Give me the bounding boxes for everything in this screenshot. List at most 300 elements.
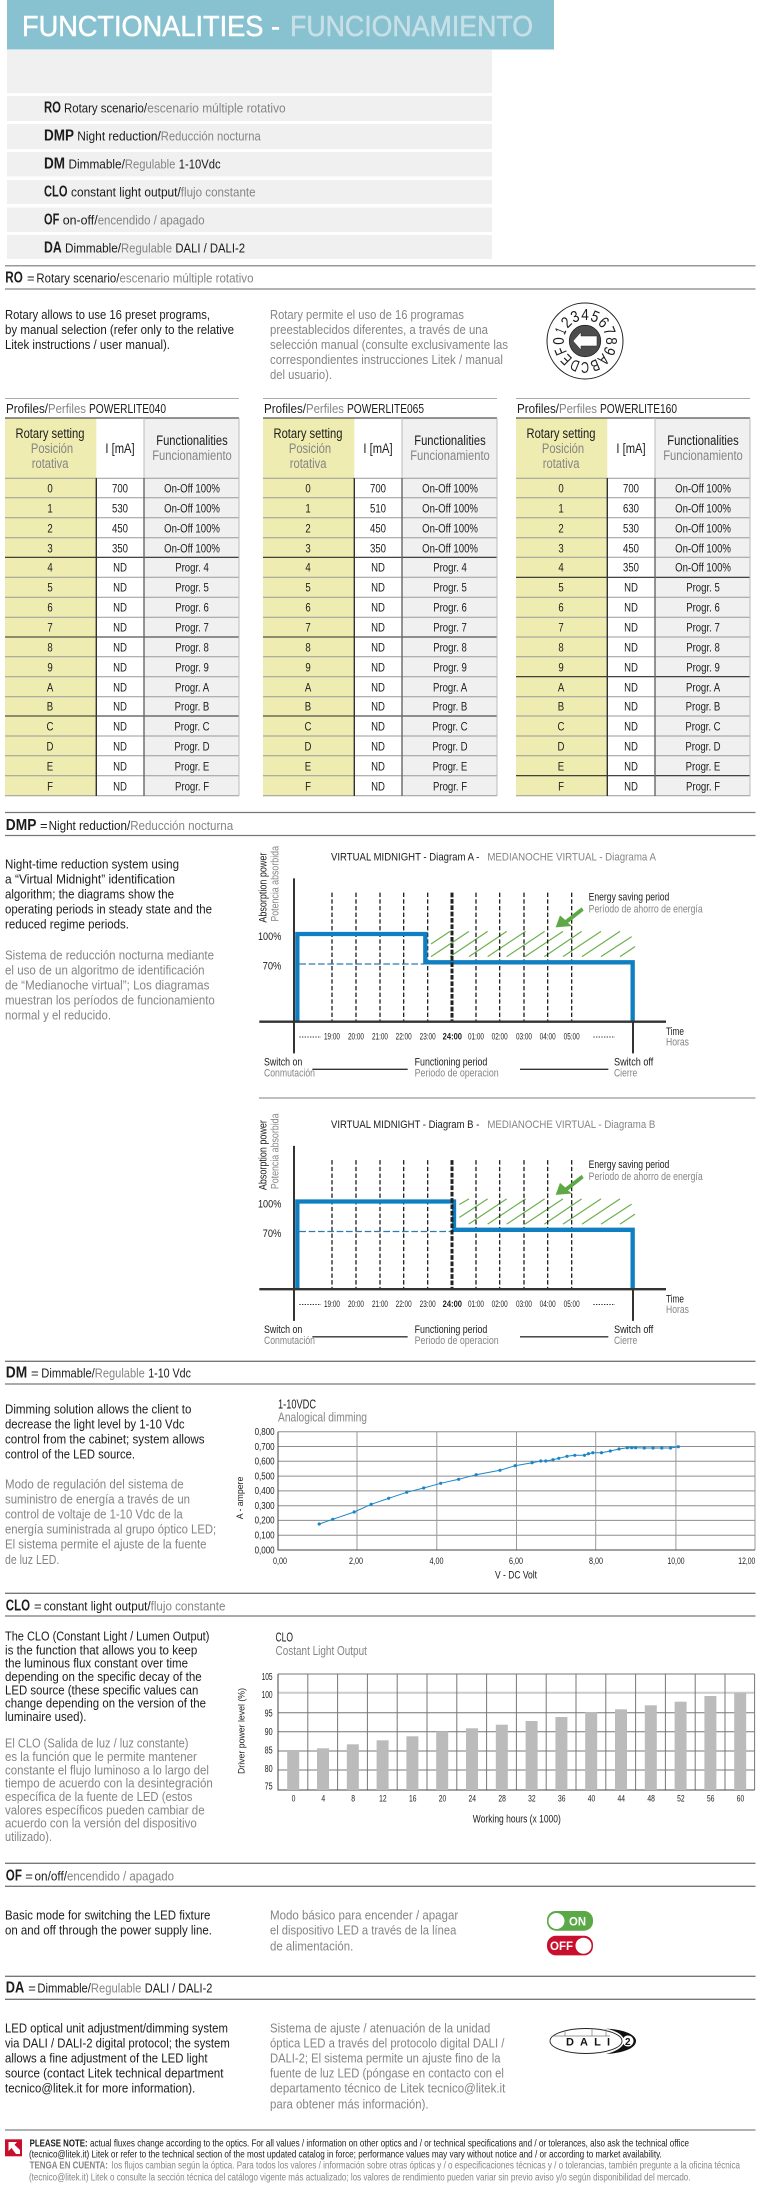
- icon: on switch: [547, 1911, 593, 1931]
- table: POWERLITE160: Progr. E: [686, 761, 720, 774]
- function list panel: escenario múltiple rotativo: [147, 101, 286, 116]
- table: POWERLITE065: D: [305, 741, 312, 754]
- icon: rotary switch: [547, 303, 623, 379]
- table: POWERLITE065: 4: [305, 562, 311, 575]
- table: POWERLITE040: 530: [112, 503, 128, 516]
- chart: constant light output bar chart: 90: [265, 1727, 273, 1738]
- function list panel: Regulable: [121, 241, 172, 256]
- text block: RO english: by manual selection (refer only to the relative: [5, 322, 234, 337]
- table: POWERLITE040: B: [47, 701, 53, 714]
- text block: DM spanish: control de voltaje de 1-10 Vdc de la: [5, 1506, 183, 1521]
- chart: constant light output bar chart: 75: [265, 1782, 273, 1793]
- table: POWERLITE160: Perfiles: [559, 401, 597, 416]
- icon: rotary switch: 2: [558, 314, 576, 332]
- table: POWERLITE040: Progr. E: [175, 761, 209, 774]
- table: POWERLITE065: 9: [305, 662, 311, 675]
- table: POWERLITE065: Progr. F: [433, 781, 467, 794]
- chart: virtual midnight diagram A: Absorption power: [258, 852, 270, 923]
- chart: virtual midnight diagram A: Time: [666, 1026, 684, 1038]
- icon: rotary switch: A: [594, 350, 612, 368]
- table: POWERLITE065: ND: [371, 761, 385, 774]
- chart: constant light output bar chart: 24: [469, 1794, 476, 1804]
- chart: virtual midnight diagram A: Switch off: [614, 1056, 654, 1068]
- table: POWERLITE160: Progr. 8: [686, 642, 720, 655]
- text block: DA spanish: para obtener más información).: [270, 2096, 429, 2111]
- table: POWERLITE040: Functionalities: [156, 433, 228, 448]
- chart: virtual midnight diagram A: 05:00: [564, 1032, 580, 1042]
- table: POWERLITE065: POWERLITE065: [347, 401, 424, 416]
- table: POWERLITE160: Profiles/: [517, 401, 559, 416]
- text block: DA spanish: DALI-2; El sistema permite un ajuste fino de la: [270, 2050, 501, 2065]
- table: POWERLITE160: [516, 398, 750, 796]
- table: POWERLITE040: Progr. 5: [175, 582, 209, 595]
- chart: virtual midnight diagram B: 05:00: [564, 1299, 580, 1309]
- table: POWERLITE160: ND: [624, 721, 638, 734]
- text block: DM english: [5, 1401, 205, 1461]
- footnote text: [29, 2139, 740, 2183]
- table: POWERLITE160: On-Off 100%: [675, 523, 731, 536]
- table: POWERLITE040: Profiles/: [6, 401, 48, 416]
- table: POWERLITE065: Rotary setting: [274, 426, 342, 441]
- table: POWERLITE065: ND: [371, 562, 385, 575]
- table: POWERLITE040: ND: [113, 562, 127, 575]
- text block: DA spanish: [270, 2020, 506, 2111]
- chart: constant light output bar chart: Driver power level (%): [236, 1688, 246, 1774]
- chart: virtual midnight diagram B: Potencia absorbida: [269, 1113, 281, 1189]
- chart: analogical dimming line chart: 10,00: [668, 1556, 684, 1566]
- chart: virtual midnight diagram B: 21:00: [372, 1299, 388, 1309]
- table: POWERLITE160: Progr. A: [686, 682, 721, 695]
- heading: CLO: constant light output/: [44, 1599, 151, 1614]
- table: POWERLITE160: Progr. D: [685, 741, 721, 754]
- chart: virtual midnight diagram A: 23:00: [420, 1032, 436, 1042]
- table: POWERLITE065: Progr. 6: [433, 602, 467, 615]
- text block: CLO spanish: valores específicos pueden cambiar de: [5, 1802, 205, 1817]
- chart: virtual midnight diagram A: Energy saving period: [589, 892, 669, 904]
- text block: DMP spanish: Sistema de reducción nocturna mediante: [5, 947, 214, 962]
- text block: DA english: [5, 2020, 230, 2095]
- table: POWERLITE160: ND: [624, 761, 638, 774]
- heading: RO: escenario múltiple rotativo: [120, 271, 254, 286]
- table: POWERLITE160: 5: [558, 582, 564, 595]
- table: POWERLITE160: Posición: [542, 441, 584, 456]
- table: POWERLITE040: Progr. 4: [175, 562, 209, 575]
- text block: CLO english: LED source (these specific values can: [5, 1683, 198, 1698]
- text block: DM english: Dimming solution allows the client to: [5, 1401, 191, 1416]
- icon: rotary switch: 6: [594, 314, 612, 332]
- text block: DA english: tecnico@litek.it for more information).: [5, 2080, 195, 2095]
- chart: virtual midnight diagram B: Horas: [666, 1304, 689, 1316]
- table: POWERLITE040: Progr. 6: [175, 602, 209, 615]
- table: POWERLITE040: POWERLITE040: [89, 401, 166, 416]
- chart: virtual midnight diagram A: 02:00: [492, 1032, 508, 1042]
- function list panel: Rotary scenario/: [64, 101, 147, 116]
- heading: DM: DM: [6, 1364, 27, 1381]
- text block: CLO spanish: utilizado).: [5, 1829, 52, 1844]
- text block: CLO english: depending on the specific decay of the: [5, 1669, 202, 1684]
- chart: constant light output bar chart: 8: [351, 1794, 355, 1804]
- icon: rotary switch: 3: [569, 308, 582, 327]
- function list panel: encendido / apagado: [98, 213, 205, 228]
- function list panel: OF: [44, 212, 59, 229]
- table: POWERLITE040: 700: [112, 483, 128, 496]
- table: POWERLITE065: On-Off 100%: [422, 503, 478, 516]
- table: POWERLITE160: 7: [558, 622, 564, 635]
- text block: CLO english: The CLO (Constant Light / Lumen Output): [5, 1629, 209, 1644]
- chart: analogical dimming line chart: 0,800: [255, 1427, 275, 1438]
- table: POWERLITE160: Rotary setting: [527, 426, 595, 441]
- table: POWERLITE065: Progr. E: [433, 761, 467, 774]
- table: POWERLITE040: ND: [113, 721, 127, 734]
- table: POWERLITE065: 1: [305, 503, 311, 516]
- chart: virtual midnight diagram A: Horas: [666, 1037, 689, 1049]
- chart: virtual midnight diagram B: Energy saving period: [589, 1159, 669, 1171]
- table: POWERLITE040: Progr. A: [175, 682, 210, 695]
- heading: OF: =: [25, 1869, 33, 1884]
- table: POWERLITE160: B: [558, 701, 564, 714]
- table: POWERLITE160: Progr. C: [685, 721, 721, 734]
- footnote text: TENGA EN CUENTA:: [30, 2161, 108, 2172]
- heading: DMP: Reducción nocturna: [130, 818, 234, 833]
- chart: analogical dimming line chart: 0,200: [255, 1516, 275, 1527]
- chart: virtual midnight diagram A: 70%: [263, 960, 282, 972]
- table: POWERLITE160: 530: [623, 523, 639, 536]
- function list panel: Dimmable/: [65, 241, 121, 256]
- chart: constant light output bar chart: 0: [292, 1794, 295, 1804]
- table: POWERLITE065: Progr. 4: [433, 562, 467, 575]
- text block: CLO english: [5, 1629, 209, 1724]
- table: POWERLITE160: D: [558, 741, 565, 754]
- table: POWERLITE160: 2: [558, 523, 564, 536]
- table: POWERLITE040: ND: [113, 781, 127, 794]
- heading: DMP: =: [40, 818, 48, 833]
- chart: virtual midnight diagram B: Cierre: [614, 1335, 637, 1347]
- table: POWERLITE160: ND: [624, 642, 638, 655]
- table: POWERLITE040: Progr. C: [174, 721, 210, 734]
- heading: DA: Regulable: [91, 1981, 141, 1996]
- text block: RO english: Litek instructions / user manual).: [5, 337, 170, 352]
- table: POWERLITE040: C: [47, 721, 54, 734]
- table: POWERLITE040: ND: [113, 642, 127, 655]
- heading: DA: [5, 1976, 756, 1999]
- chart: virtual midnight diagram B: Periodo de operacion: [415, 1335, 499, 1347]
- text block: RO spanish: preestablecidos diferentes, a través de una: [270, 322, 489, 337]
- chart: constant light output bar chart: 48: [647, 1794, 655, 1804]
- function list panel: on-off/: [63, 213, 98, 228]
- table: POWERLITE040: Progr. D: [174, 741, 210, 754]
- heading: CLO: CLO: [6, 1598, 30, 1615]
- text block: DM spanish: suministro de energía a través de un: [5, 1491, 190, 1506]
- icon: rotary switch: E: [558, 350, 576, 368]
- icon: rotary switch: 1: [553, 326, 570, 337]
- table: POWERLITE160: ND: [624, 741, 638, 754]
- table: POWERLITE040: Progr. 7: [175, 622, 209, 635]
- table: POWERLITE160: Progr. B: [686, 701, 720, 714]
- table: POWERLITE040: Progr. 8: [175, 642, 209, 655]
- table: POWERLITE040: On-Off 100%: [164, 543, 220, 556]
- table: POWERLITE160: Functionalities: [667, 433, 739, 448]
- chart: analogical dimming line chart: 4,00: [430, 1556, 444, 1566]
- table: POWERLITE065: ND: [371, 602, 385, 615]
- text block: CLO spanish: acuerdo con la versión del dispositivo: [5, 1816, 197, 1831]
- table: POWERLITE040: Posición: [31, 441, 73, 456]
- text block: RO english: [5, 307, 234, 352]
- chart: constant light output bar chart: 4: [321, 1794, 325, 1804]
- table: POWERLITE160: ND: [624, 582, 638, 595]
- table: POWERLITE065: 5: [305, 582, 311, 595]
- chart: virtual midnight diagram A: 100%: [258, 931, 282, 943]
- table: POWERLITE160: ND: [624, 701, 638, 714]
- icon: red note arrow: [5, 2139, 22, 2156]
- table: POWERLITE160: 0: [558, 483, 564, 496]
- table: POWERLITE160: ND: [624, 622, 638, 635]
- icon: DALI-2 logo: DALI: [566, 2036, 610, 2048]
- table: POWERLITE065: ND: [371, 701, 385, 714]
- icon: off switch: [547, 1936, 593, 1955]
- table: POWERLITE065: 700: [370, 483, 386, 496]
- table: POWERLITE040: 2: [47, 523, 53, 536]
- table: POWERLITE065: [263, 398, 497, 796]
- chart: constant light output bar chart: 52: [677, 1794, 685, 1804]
- text block: DMP english: a “Virtual Midnight” identification: [5, 871, 175, 886]
- table: POWERLITE040: I [mA]: [105, 441, 135, 456]
- heading: DM: Regulable: [95, 1365, 145, 1380]
- chart: virtual midnight diagram B: 23:00: [420, 1299, 436, 1309]
- chart: virtual midnight diagram A: Functioning period: [415, 1056, 487, 1068]
- text block: OF english: on and off through the power supply line.: [5, 1922, 212, 1937]
- table: POWERLITE040: Funcionamiento: [152, 448, 232, 463]
- table: POWERLITE065: ND: [371, 721, 385, 734]
- table: POWERLITE160: ND: [624, 602, 638, 615]
- chart: virtual midnight diagram A: 04:00: [540, 1032, 556, 1042]
- chart: constant light output bar chart: CLO: [276, 1630, 293, 1645]
- chart: virtual midnight diagram A: 22:00: [396, 1032, 412, 1042]
- table: POWERLITE065: ND: [371, 741, 385, 754]
- table: POWERLITE065: On-Off 100%: [422, 483, 478, 496]
- table: POWERLITE040: D: [47, 741, 54, 754]
- icon: rotary switch: 5: [588, 308, 602, 327]
- function list panel: Reducción nocturna: [161, 129, 261, 144]
- chart: virtual midnight diagram A: VIRTUAL MIDNIGHT - Diagram A -: [331, 852, 480, 864]
- table: POWERLITE160: 4: [558, 562, 564, 575]
- text block: CLO english: luminaire used).: [5, 1709, 86, 1724]
- chart: virtual midnight diagram A: Período de ahorro de energía: [589, 903, 703, 915]
- table: POWERLITE065: rotativa: [290, 456, 327, 471]
- table: POWERLITE160: ND: [624, 781, 638, 794]
- table: POWERLITE160: On-Off 100%: [675, 543, 731, 556]
- text block: OF english: Basic mode for switching the LED fixture: [5, 1907, 210, 1922]
- table: POWERLITE065: Progr. A: [433, 682, 468, 695]
- chart: virtual midnight diagram A: 19:00: [324, 1032, 340, 1042]
- chart: virtual midnight diagram B: 70%: [263, 1228, 282, 1240]
- chart: virtual midnight diagram B: 100%: [258, 1198, 282, 1210]
- chart: virtual midnight diagram A: Switch on: [264, 1056, 302, 1068]
- icon: on switch: ON: [569, 1914, 586, 1928]
- table: POWERLITE160: Progr. 9: [686, 662, 720, 675]
- table: POWERLITE065: On-Off 100%: [422, 543, 478, 556]
- text block: DM spanish: [5, 1476, 216, 1567]
- chart: constant light output bar chart: 85: [265, 1746, 273, 1757]
- text block: RO spanish: [270, 307, 508, 382]
- table: POWERLITE040: ND: [113, 741, 127, 754]
- icon: rotary switch: D: [568, 355, 582, 374]
- text block: DA english: LED optical unit adjustment/dimming system: [5, 2020, 228, 2035]
- function list panel: Night reduction/: [77, 129, 161, 144]
- chart: constant light output bar chart: 20: [439, 1794, 446, 1804]
- table: POWERLITE160: POWERLITE160: [600, 401, 677, 416]
- chart: constant light output bar chart: 40: [588, 1794, 595, 1804]
- chart: analogical dimming line chart: 0,600: [255, 1457, 275, 1468]
- table: POWERLITE160: 450: [623, 543, 639, 556]
- chart: constant light output bar chart: 12: [379, 1794, 387, 1804]
- text block: OF spanish: el dispositivo LED a través de la línea: [270, 1922, 457, 1937]
- chart: constant light output bar chart: 60: [737, 1794, 744, 1804]
- table: POWERLITE065: C: [305, 721, 312, 734]
- table: POWERLITE160: 8: [558, 642, 564, 655]
- chart: virtual midnight diagram B: 19:00: [324, 1299, 340, 1309]
- table: POWERLITE065: I [mA]: [363, 441, 393, 456]
- function list panel: CLO: [44, 184, 68, 201]
- chart: analogical dimming line chart: Analogical dimming: [278, 1410, 367, 1425]
- heading: OF: on/off/: [34, 1869, 67, 1884]
- heading: DA: =: [28, 1981, 36, 1996]
- chart: constant light output bar chart: 80: [265, 1764, 273, 1775]
- table: POWERLITE065: Progr. 8: [433, 642, 467, 655]
- table: POWERLITE160: ND: [624, 682, 638, 695]
- table: POWERLITE065: E: [305, 761, 311, 774]
- title banner: FUNCIONAMIENTO: [290, 11, 533, 43]
- icon: DALI-2 logo: [550, 2028, 636, 2054]
- function list panel: DALI / DALI-2: [175, 241, 245, 256]
- text block: DA spanish: fuente de luz LED (póngase en contacto con el: [270, 2065, 504, 2080]
- table: POWERLITE040: Progr. 9: [175, 662, 209, 675]
- table: POWERLITE065: Progr. D: [432, 741, 468, 754]
- table: POWERLITE040: Rotary setting: [16, 426, 84, 441]
- chart: constant light output bar chart: 16: [409, 1794, 416, 1804]
- chart: virtual midnight diagram A: 20:00: [348, 1032, 364, 1042]
- table: POWERLITE065: B: [305, 701, 311, 714]
- table: POWERLITE160: Progr. 7: [686, 622, 720, 635]
- heading: CLO: [5, 1593, 756, 1616]
- table: POWERLITE160: 700: [623, 483, 639, 496]
- heading: DA: DA: [6, 1980, 25, 1997]
- table: POWERLITE065: ND: [371, 582, 385, 595]
- chart: virtual midnight diagram B: MEDIANOCHE VIRTUAL - Diagrama B: [487, 1119, 655, 1131]
- table: POWERLITE065: Progr. 9: [433, 662, 467, 675]
- chart: virtual midnight diagram A: [258, 845, 703, 1080]
- chart: virtual midnight diagram B: [258, 1113, 703, 1347]
- table: POWERLITE160: On-Off 100%: [675, 483, 731, 496]
- chart: virtual midnight diagram A: Cierre: [614, 1068, 637, 1080]
- chart: virtual midnight diagram B: Functioning period: [415, 1324, 487, 1336]
- function list panel: constant light output/: [71, 185, 181, 200]
- table: POWERLITE040: 5: [47, 582, 53, 595]
- chart: virtual midnight diagram B: 03:00: [516, 1299, 532, 1309]
- table: POWERLITE065: Funcionamiento: [410, 448, 490, 463]
- chart: analogical dimming line chart: 0,300: [255, 1501, 275, 1512]
- table: POWERLITE040: ND: [113, 582, 127, 595]
- text block: DMP english: operating periods in steady state and the: [5, 901, 212, 916]
- chart: virtual midnight diagram A: 24:00: [443, 1032, 462, 1042]
- text block: RO spanish: Rotary permite el uso de 16 programas: [270, 307, 464, 322]
- table: POWERLITE065: Profiles/: [264, 401, 306, 416]
- chart: analogical dimming line chart: V - DC Volt: [495, 1569, 537, 1581]
- heading: DMP: DMP: [6, 817, 37, 834]
- table: POWERLITE065: Progr. B: [433, 701, 467, 714]
- chart: virtual midnight diagram A: MEDIANOCHE VIRTUAL - Diagrama A: [487, 852, 657, 864]
- heading: RO: [5, 266, 756, 289]
- text block: DMP english: [5, 856, 212, 931]
- table: POWERLITE040: On-Off 100%: [164, 483, 220, 496]
- chart: analogical dimming line chart: 8,00: [589, 1556, 603, 1566]
- text block: CLO english: change depending on the version of the: [5, 1696, 206, 1711]
- chart: virtual midnight diagram A: Periodo de operacion: [415, 1068, 499, 1080]
- table: POWERLITE160: On-Off 100%: [675, 562, 731, 575]
- function list panel: DMP: [44, 128, 74, 145]
- function list panel: Dimmable/: [68, 157, 125, 172]
- table: POWERLITE040: 7: [47, 622, 53, 635]
- icon: rotary switch: 9: [599, 344, 618, 358]
- text block: CLO spanish: es la función que le permite mantener: [5, 1749, 197, 1764]
- chart: constant light output bar chart: Working hours (x 1000): [473, 1814, 561, 1826]
- heading: DMP: [5, 812, 756, 836]
- table: POWERLITE160: Progr. F: [686, 781, 720, 794]
- heading: DM: =: [31, 1365, 39, 1380]
- table: POWERLITE160: rotativa: [543, 456, 580, 471]
- text block: DM spanish: El sistema permite el ajuste de la fuente: [5, 1536, 206, 1551]
- table: POWERLITE065: 2: [305, 523, 311, 536]
- icon: rotary switch: F: [552, 344, 571, 357]
- text block: DM spanish: de luz LED.: [5, 1552, 59, 1567]
- heading: OF: OF: [6, 1868, 22, 1885]
- table: POWERLITE160: I [mA]: [616, 441, 646, 456]
- function list panel: DA: [44, 240, 62, 257]
- text block: DMP spanish: de “Medianoche virtual”; Los diagramas: [5, 977, 210, 992]
- chart: constant light output bar chart: 105: [262, 1672, 273, 1683]
- text block: DMP spanish: muestran los períodos de funcionamiento: [5, 992, 215, 1007]
- text block: DMP spanish: el uso de un algoritmo de identificación: [5, 962, 205, 977]
- table: POWERLITE160: 1: [558, 503, 564, 516]
- chart: constant light output bar chart: 95: [265, 1708, 273, 1719]
- text block: CLO spanish: específica de la fuente de LED (estos: [5, 1789, 193, 1804]
- icon: rotary switch: 4: [581, 307, 589, 324]
- chart: constant light output bar chart: Costant Light Output: [276, 1643, 367, 1658]
- table: POWERLITE040: 0: [47, 483, 53, 496]
- chart: virtual midnight diagram B: 01:00: [468, 1299, 484, 1309]
- chart: analogical dimming line chart: 0,700: [255, 1442, 275, 1453]
- text block: OF spanish: [270, 1907, 459, 1954]
- icon: rotary switch: 7: [599, 325, 618, 338]
- chart: virtual midnight diagram B: 22:00: [396, 1299, 412, 1309]
- text block: DMP spanish: [5, 947, 215, 1022]
- text block: DM spanish: energía suministrada al grupo óptico LED;: [5, 1521, 216, 1536]
- table: POWERLITE160: On-Off 100%: [675, 503, 731, 516]
- table: POWERLITE040: On-Off 100%: [164, 503, 220, 516]
- chart: virtual midnight diagram B: Conmutación: [264, 1335, 315, 1347]
- heading: DMP: Night reduction/: [49, 818, 131, 833]
- table: POWERLITE065: A: [305, 682, 312, 695]
- table: POWERLITE040: E: [47, 761, 53, 774]
- text block: CLO english: the luminous flux constant over time: [5, 1656, 188, 1671]
- chart: virtual midnight diagram B: 02:00: [492, 1299, 508, 1309]
- table: POWERLITE160: 3: [558, 543, 564, 556]
- table: POWERLITE065: ND: [371, 642, 385, 655]
- text block: DA spanish: óptica LED a través del protocolo digital DALI /: [270, 2035, 505, 2050]
- table: POWERLITE040: 450: [112, 523, 128, 536]
- table: POWERLITE065: ND: [371, 781, 385, 794]
- chart: constant light output bar chart: 100: [262, 1690, 273, 1701]
- function list panel: DM: [44, 156, 65, 173]
